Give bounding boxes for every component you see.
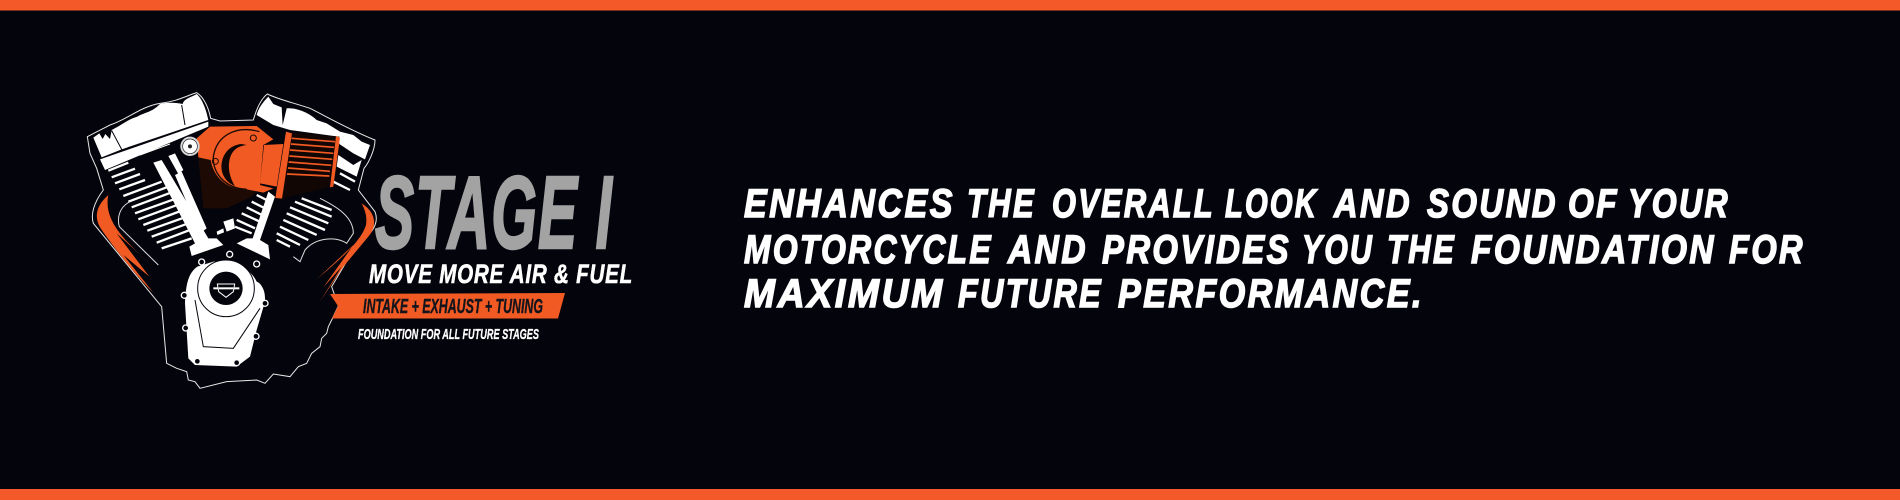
description text block: MAXIMUM: [744, 272, 945, 316]
description text block: PERFORMANCE.: [1118, 272, 1424, 316]
bottom orange bar: [0, 489, 1900, 500]
crank pulley circle: [180, 137, 200, 156]
description text block: LOOK: [1225, 182, 1318, 226]
air filter orange bands: [275, 132, 340, 199]
case bolts: [181, 251, 268, 366]
centre detail: [217, 218, 235, 235]
white engine case: [185, 261, 265, 367]
tagline: foundation: FOUNDATION FOR ALL FUTURE STAGES: [358, 326, 539, 343]
top orange bar: [0, 0, 1900, 10]
orange intake neck: [260, 144, 283, 187]
description text block: PROVIDES: [1102, 228, 1291, 272]
orange banner: [330, 293, 565, 318]
right cylinder fins: [235, 173, 355, 247]
intake ring opening: [213, 130, 259, 189]
left cylinder head: [93, 94, 208, 170]
lower intake cover: [198, 153, 263, 208]
description text block: ENHANCES: [744, 182, 955, 226]
left orange flame: [97, 195, 155, 293]
description text block: THE: [967, 182, 1036, 226]
description text block: FUTURE: [958, 272, 1103, 316]
engine outline: [87, 93, 376, 388]
orange intake cover: [197, 126, 273, 193]
description text block: YOUR: [1628, 182, 1730, 226]
derby cover: [198, 260, 254, 317]
left pushrod tubes: [153, 153, 223, 256]
air filter body: [282, 133, 339, 198]
logo disc: [209, 272, 243, 305]
crankcase side curves: [118, 198, 353, 265]
air filter stripes: [287, 138, 335, 176]
description text block: FOUNDATION: [1471, 228, 1716, 272]
right orange flame: [317, 203, 374, 302]
description text block: MOTORCYCLE: [744, 228, 993, 272]
description text block: FOR: [1729, 228, 1805, 272]
left head detail line: [140, 144, 170, 155]
left cylinder fins: [108, 163, 192, 248]
left head seams: [112, 105, 185, 149]
heading: stage I: STAGE I: [375, 155, 613, 270]
case inner outline: [195, 300, 260, 348]
cover bolts: [212, 135, 256, 164]
description text block: [744, 182, 1805, 316]
right cylinder head: [257, 97, 370, 177]
banner text: INTAKE + EXHAUST + TUNING: [363, 296, 543, 318]
description text block: THE: [1387, 228, 1456, 272]
description text block: YOU: [1302, 228, 1374, 272]
description text block: AND: [1333, 182, 1412, 226]
description text block: SOUND: [1427, 182, 1558, 226]
description text block: AND: [1007, 228, 1088, 272]
icon: engine illustration: [87, 93, 376, 388]
subheading: move more air and fuel: MOVE MORE AIR & FUEL: [369, 259, 633, 289]
description text block: OF: [1568, 182, 1619, 226]
description text block: OVERALL: [1052, 182, 1215, 226]
right pushrod tubes: [237, 192, 275, 259]
